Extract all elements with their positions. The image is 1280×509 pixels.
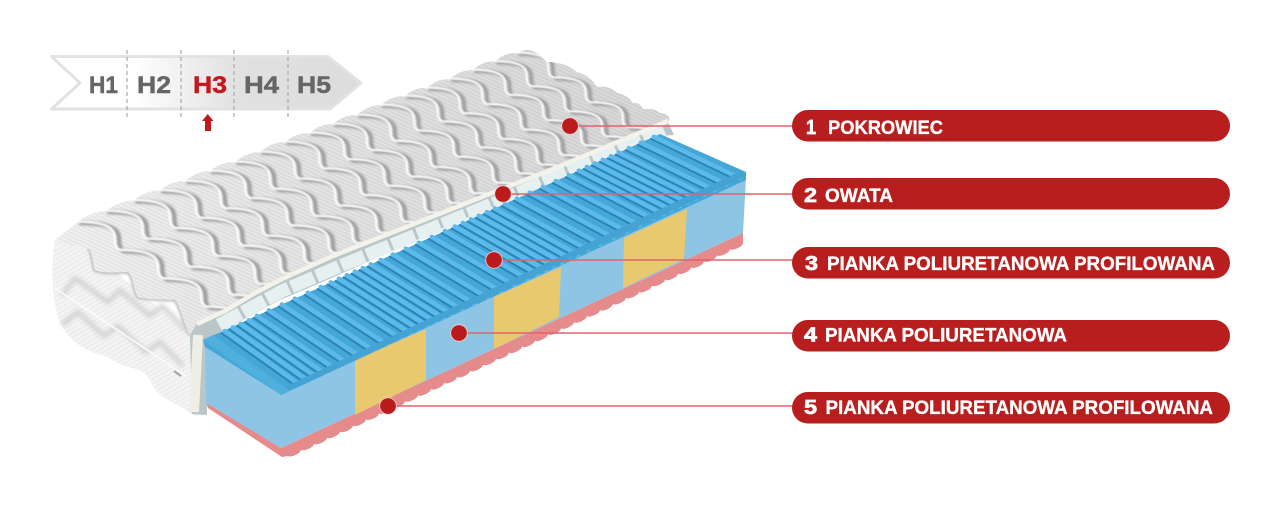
leader line 1 (570, 125, 793, 127)
pill 3 (792, 247, 1230, 278)
pill 5 (792, 392, 1230, 424)
number 5: 5 (804, 397, 817, 419)
leader line 3 (494, 259, 793, 261)
callout 1: cover (562, 110, 1230, 142)
icon: up arrow marking H3 (202, 114, 214, 131)
marker dot 2 (495, 186, 511, 202)
number 3: 3 (805, 253, 818, 275)
label 4: PIANKA POLIURETANOWA (825, 324, 1067, 346)
mattress cover side (53, 240, 205, 416)
layer 5: profiled bottom foam (206, 233, 743, 457)
layer 3: profiled top foam (203, 134, 746, 395)
scale dividers (127, 50, 288, 118)
number 4: 4 (804, 324, 818, 346)
label H4: H4 (244, 72, 279, 99)
callout 3: profiled polyurethane foam (486, 247, 1230, 278)
label H5: H5 (297, 72, 331, 99)
layer 4: foam block faces (205, 178, 746, 448)
marker dot 5 (380, 398, 396, 414)
number 2: 2 (804, 185, 817, 207)
label 2: OWATA (825, 185, 893, 207)
callout 5: profiled polyurethane foam (380, 392, 1230, 424)
callout 4: polyurethane foam (451, 320, 1230, 352)
firmness scale H1-H5 (52, 50, 361, 131)
label 5: PIANKA POLIURETANOWA PROFILOWANA (826, 397, 1213, 419)
callout 2: wadding (495, 178, 1230, 210)
leader line 4 (459, 332, 793, 334)
pill 2 (792, 178, 1230, 210)
pill 4 (792, 320, 1230, 352)
label H2: H2 (137, 72, 171, 99)
label H1: H1 (89, 72, 118, 99)
label 1: POKROWIEC (828, 117, 943, 139)
pill 1 (792, 110, 1230, 142)
number 1: 1 (806, 117, 816, 139)
label H3: H3 (193, 72, 227, 99)
leader line 5 (388, 405, 793, 407)
wadding layer (190, 120, 674, 415)
marker dot 3 (486, 252, 502, 268)
mattress illustration (53, 50, 746, 457)
marker dot 4 (451, 325, 467, 341)
leader line 2 (503, 193, 793, 195)
marker dot 1 (562, 118, 578, 134)
scale arrow banner (52, 56, 361, 109)
label 3: PIANKA POLIURETANOWA PROFILOWANA (827, 253, 1215, 275)
mattress cover top with quilted waves (55, 50, 670, 336)
